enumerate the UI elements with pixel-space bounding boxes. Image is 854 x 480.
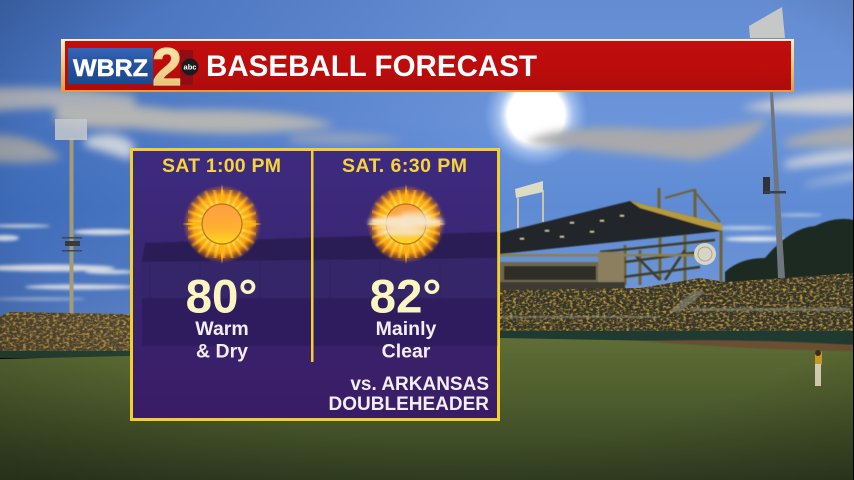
left column: Saturday 1:00 PM xyxy=(162,155,281,362)
outfield wall xyxy=(0,331,854,358)
icon: sun xyxy=(182,184,262,264)
condition: Clear xyxy=(382,340,431,362)
temperature: 80° xyxy=(186,270,257,324)
left cloud streaks xyxy=(0,224,137,300)
forecast panel xyxy=(130,148,500,421)
condition xyxy=(376,318,436,362)
logo: WBRZ 2 abc xyxy=(68,38,198,97)
logo: WBRZ 2 abc: 2 xyxy=(152,38,182,97)
crowd right stands xyxy=(500,273,854,335)
right column: Saturday 6:30 PM xyxy=(342,155,467,362)
right time heading: SAT. 6:30 PM xyxy=(342,155,467,177)
icon: sun behind cloud xyxy=(366,184,446,264)
outfield grass xyxy=(0,338,854,480)
concrete aisles xyxy=(500,290,850,318)
horizon streaks right xyxy=(715,214,822,242)
divider xyxy=(311,150,314,362)
crowd left stands xyxy=(0,312,130,352)
tree line xyxy=(725,219,854,290)
stadium silhouette in panel xyxy=(142,232,497,346)
matchup note: DOUBLEHEADER xyxy=(329,394,489,415)
right clouds xyxy=(525,92,854,186)
matchup note xyxy=(329,374,489,415)
left time heading: SAT 1:00 PM xyxy=(162,155,281,177)
logo: WBRZ 2 abc: WBRZ xyxy=(73,55,148,82)
flag pole and flag xyxy=(515,181,544,228)
title: BASEBALL FORECAST xyxy=(206,50,537,83)
outfielder xyxy=(815,350,822,386)
matchup note: vs. ARKANSAS xyxy=(350,374,489,395)
condition xyxy=(195,318,249,362)
scoreboard clock xyxy=(694,243,716,265)
left clouds xyxy=(0,87,405,163)
grandstand structure xyxy=(500,188,722,296)
condition: Warm xyxy=(195,318,249,340)
left light tower xyxy=(55,119,87,320)
title banner xyxy=(61,38,794,97)
condition: Mainly xyxy=(376,318,436,340)
condition: & Dry xyxy=(196,340,248,362)
warning track xyxy=(640,340,854,351)
right light tower xyxy=(749,7,786,278)
temperature: 82° xyxy=(370,270,441,324)
abc badge: abc xyxy=(184,62,196,72)
sun glare in sky xyxy=(484,63,588,167)
